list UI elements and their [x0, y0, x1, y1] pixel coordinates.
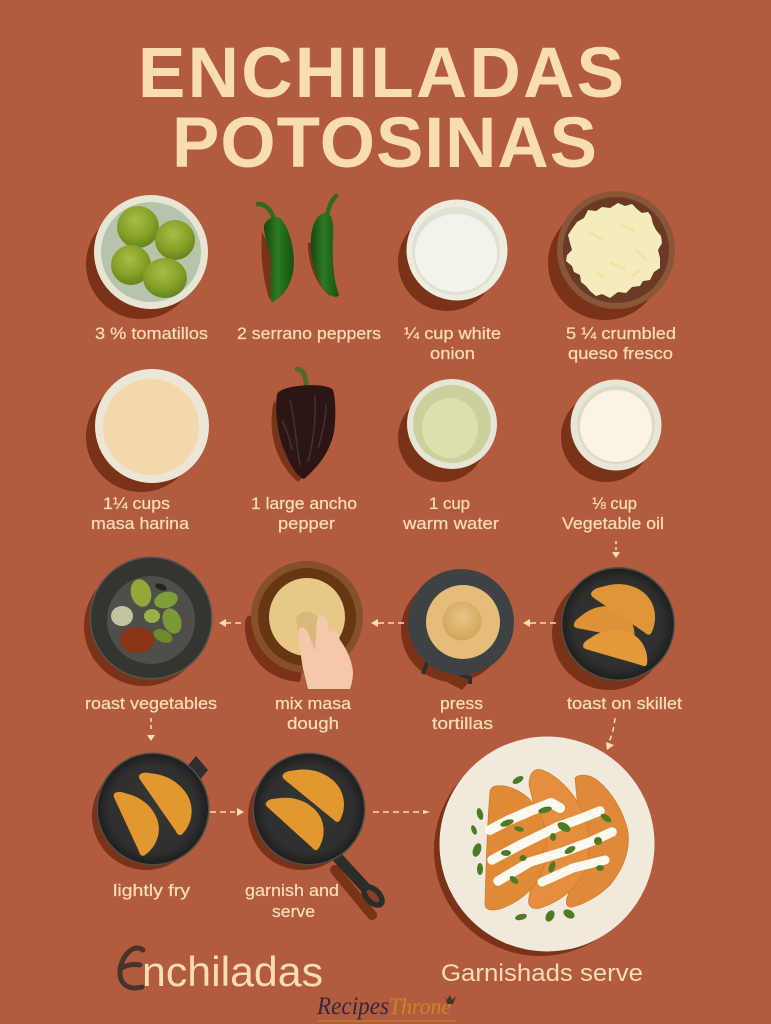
arrow: roast to fry	[147, 718, 155, 741]
plate: finished enchiladas	[434, 736, 654, 956]
crema drizzle	[490, 803, 612, 882]
ingredient: vegetable oil: ⅛ cup	[592, 495, 637, 513]
enchiladas	[485, 770, 628, 910]
step: lightly fry: lightly fry	[113, 882, 191, 900]
ingredient: queso fresco: queso fresco	[568, 345, 673, 363]
title: POTOSINAS	[172, 104, 597, 183]
step: press tortillas: press	[440, 695, 483, 713]
arrow: press to mix	[371, 619, 405, 627]
ingredient: vegetable oil: Vegetable oil	[562, 515, 664, 533]
caption: Garnishads serve: Garnishads serve	[441, 960, 643, 987]
step: roast vegetables	[84, 556, 217, 713]
arrow: skillet to plate	[606, 718, 615, 750]
ingredient: warm water: 1 cup	[429, 495, 470, 513]
ingredient: serrano peppers	[237, 196, 381, 343]
arrow: garnish to plate	[373, 810, 430, 814]
title	[138, 34, 624, 183]
arrow: fry to garnish	[210, 808, 244, 816]
arrow: mix to roast	[219, 619, 243, 627]
ingredient: white onion: onion	[430, 345, 475, 363]
step: press tortillas	[401, 569, 514, 733]
ingredient: masa harina: masa harina	[91, 515, 190, 533]
step: garnish and serve: garnish and	[245, 882, 339, 900]
ingredient: ancho pepper: pepper	[278, 515, 336, 533]
step: garnish and serve	[245, 752, 389, 921]
title: ENCHILADAS	[138, 34, 624, 113]
ingredient: queso fresco	[548, 191, 676, 363]
ingredient: serrano peppers: 2 serrano peppers	[237, 325, 381, 343]
step: mix masa dough	[245, 561, 363, 733]
green onion	[470, 774, 613, 923]
ingredient: tomatillos: 3 % tomatillos	[95, 325, 208, 343]
step: garnish and serve: serve	[272, 903, 315, 921]
step: toast on skillet: toast on skillet	[567, 695, 682, 713]
logo: Recipes Throne	[316, 993, 456, 1021]
arrow: oil to skillet	[612, 541, 620, 558]
ingredient: warm water	[398, 379, 500, 533]
ingredient: vegetable oil	[561, 380, 664, 533]
ingredient: ancho pepper	[251, 369, 357, 533]
step: roast vegetables: roast vegetables	[85, 695, 217, 713]
step: toast on skillet	[552, 567, 682, 713]
ingredient: masa harina: 1¼ cups	[103, 495, 170, 513]
step: lightly fry	[92, 752, 210, 900]
hand	[298, 614, 353, 689]
step: mix masa dough: mix masa	[275, 695, 352, 713]
bottom wordmark: Enchiladas: nchiladas	[142, 948, 323, 995]
logo: Recipes Throne: Recipes	[316, 993, 389, 1020]
logo: Recipes Throne: Throne	[389, 994, 451, 1019]
ingredient: queso fresco: 5 ¼ crumbled	[566, 325, 676, 343]
step: mix masa dough: dough	[287, 715, 339, 733]
ingredient: tomatillos	[86, 195, 208, 343]
ingredient: masa harina	[86, 369, 209, 533]
ingredient: warm water: warm water	[402, 515, 500, 533]
ingredient: ancho pepper: 1 large ancho	[251, 495, 357, 513]
step: press tortillas: tortillas	[432, 715, 493, 733]
ingredient: white onion	[398, 200, 508, 363]
arrow: skillet to press	[523, 619, 556, 627]
ingredient: white onion: ¼ cup white	[404, 325, 501, 343]
